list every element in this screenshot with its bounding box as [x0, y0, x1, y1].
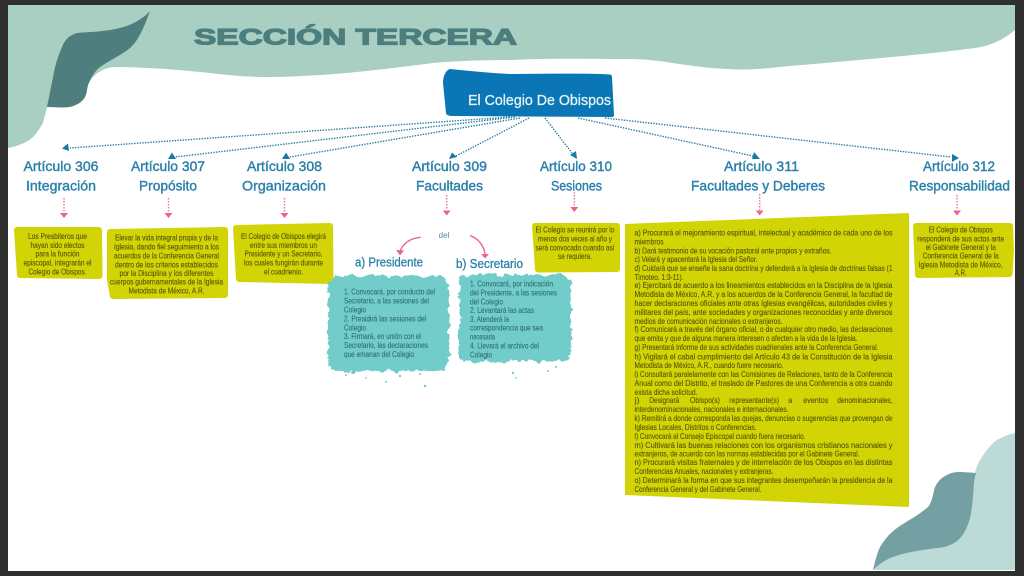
- article 311 column: Obispo(s): [690, 396, 720, 405]
- article 311 column: interdenominacionales, nacionales e internacionales.: [634, 405, 788, 414]
- article 312 column: Artículo 312: [923, 158, 995, 174]
- article 311 column: b) Dará testimonio de su vocación pastoral ante propios y extraños.: [634, 246, 832, 255]
- panel: presidente duties: 2. Presidirá las sesiones del: [344, 314, 426, 323]
- article 308 column: [236, 158, 330, 281]
- panel: secretario duties: necesaria: [470, 333, 495, 342]
- article 311 column: l) Convocará al Consejo Episcopal cuando fuera necesario.: [634, 432, 806, 441]
- article 311 column: medios de comunicación nacionales o extranjeros.: [634, 317, 782, 326]
- article 311 column: Metodista de México, A.R. y a los acuerdos de la Conferencia General, la facultad de: [634, 290, 893, 299]
- article 311 column: Designará: [649, 396, 680, 405]
- panel: secretario duties: Colegio: [470, 350, 492, 359]
- article 311 column: m) Cultivará las buenas relaciones con los organismos cristianos nacionales y: [634, 441, 893, 450]
- article 311 column: f) Comunicará a través del órgano oficial, o de cualquier otro medio, las declaraciones: [634, 325, 892, 334]
- article 311 column: i) Consultará paralelamente con las Comisiones de Relaciones, tanto de la Conferencia: [634, 370, 893, 379]
- article 312 column: El Colegio de Obispos: [929, 225, 993, 234]
- article 311 column: que emita y que de alguna manera interesen o afecten a la vida de la Iglesia.: [634, 334, 858, 343]
- article 308 column: El Colegio de Obispos elegirá: [241, 232, 326, 241]
- article 311 column: representante(s): [729, 396, 779, 405]
- article 307 column: Artículo 307: [131, 158, 205, 174]
- panel: presidente duties: 3. Firmará, en unión con el: [344, 332, 421, 341]
- article 311 column: a) Procurará el mejoramiento espiritual, intelectual y académico de cada uno de los: [634, 229, 892, 238]
- article 311 column: c) Velará y apacentará la Iglesia del Señor.: [634, 255, 758, 264]
- panel: presidente duties: Colegio: [344, 306, 366, 315]
- subheading: a) Presidente: a) Presidente: [355, 254, 423, 270]
- article 307 column: por la Disciplina y los diferentes: [120, 269, 214, 278]
- article 308 column: el cuadrienio.: [264, 268, 303, 277]
- article 311 column: Metodista de México, A.R., cuando fuere necesario.: [634, 361, 784, 370]
- article 311 column: Conferencia General y del Gabinete General.: [634, 485, 762, 494]
- article 306 column: para la función: [36, 250, 80, 259]
- article 311 column: h) Vigilará el cabal cumplimiento del Artículo 43 de la Constitución de la Iglesia: [634, 353, 893, 362]
- article 311 column: Iglesias Locales, Distritos o Conferencias.: [634, 423, 756, 432]
- heading box: El Colegio De Obispos: El Colegio De Obispos: [468, 93, 611, 109]
- article 310 column: se requiera.: [558, 252, 592, 261]
- article 310 column: menos dos veces al año y: [538, 235, 613, 244]
- article 306 column: Integración: [26, 178, 96, 194]
- article 311 column: j): [634, 396, 640, 405]
- article 307 column: Iglesia, dando fiel seguimiento a los: [114, 243, 219, 252]
- article 311 column: denominacionales,: [837, 396, 893, 405]
- article 311 column: eventos: [803, 396, 828, 405]
- panel: secretario duties: 1. Convocará, por indicación: [470, 279, 553, 288]
- panel: secretario duties: 4. Llevará el archivo del: [470, 342, 539, 351]
- article 311 column: d) Cuidará que se enseñe la sana doctrina y defenderá a la Iglesia de doctrinas falsas (1: [634, 264, 893, 273]
- article 308 column: los cuales fungirán durante: [244, 258, 323, 267]
- article 307 column: Propósito: [139, 178, 197, 194]
- article 311 column: Facultades y Deberes: [691, 178, 825, 194]
- article 311 column: Anual como del Distrito, el traslado de Pastores de una Conferencia a otra cuando: [634, 379, 893, 388]
- article 306 column: hayan sido electos: [30, 241, 84, 250]
- article 311 column: militares del país, ante sociedades y organizaciones reconocidas y ante diversos: [634, 308, 892, 317]
- article 311 column: hacer declaraciones oficiales ante otras Iglesias evangélicas, autoridades civiles y: [634, 299, 893, 308]
- article 311 column: [625, 158, 909, 507]
- article 310 column: El Colegio se reunirá por lo: [536, 225, 615, 234]
- panel: presidente duties: 1. Convocará, por conducto del: [344, 288, 435, 297]
- article 311 column: a: [788, 396, 793, 405]
- article 311 column: k) Remitirá a donde corresponda las quejas, denuncias o sugerencias que provengan de: [634, 414, 893, 423]
- article 312 column: el Gabinete General y la: [926, 243, 996, 252]
- article 310 column: [535, 158, 617, 270]
- decorative shapes bottom right: [873, 433, 1015, 570]
- article 308 column: Artículo 308: [247, 158, 322, 174]
- article 310 column: Sesiones: [551, 178, 602, 194]
- article 307 column: [110, 158, 225, 296]
- article 306 column: [17, 158, 100, 277]
- article 306 column: Artículo 306: [24, 158, 99, 174]
- article 311 column: g) Presentará informe de sus actividades cuadrienales ante la Conferencia General.: [634, 343, 878, 352]
- article 307 column: dentro de los criterios establecidos: [115, 260, 218, 269]
- panel: presidente duties: Secretario, a las sesiones del: [344, 297, 429, 306]
- article 311 column: o) Determinará la forma en que sus integrantes desempeñarán la presidencia de la: [634, 476, 893, 485]
- panel: secretario duties: del Colegio: [470, 297, 503, 306]
- article 312 column: A.R.: [955, 268, 967, 277]
- article 309 column: Artículo 309: [412, 158, 487, 174]
- header band: [8, 5, 1015, 148]
- subheading: b) Secretario: b) Secretario: [456, 256, 523, 271]
- article 312 column: Conferencia General de la: [923, 251, 999, 260]
- article 311 column: miembros: [634, 238, 664, 246]
- article 311 column: Conferencias Anuales, nacionales y extranjeras.: [634, 467, 774, 476]
- article 311 column: n) Procurará visitas fraternales y de interrelación de los Obispos en las distintas: [634, 458, 892, 467]
- article 311 column: extranjeros, de acuerdo con las normas establecidas por el Gabinete General.: [634, 450, 860, 458]
- article 312 column: responderá de sus actos ante: [917, 235, 1005, 244]
- heading box: El Colegio De Obispos: [443, 69, 614, 117]
- panel: secretario duties: 2. Levantará las actas: [470, 306, 534, 315]
- article 310 column: será convocado cuando así: [536, 243, 615, 252]
- article 311 column: exista dicha solicitud.: [634, 388, 698, 397]
- article 306 column: Los Presbiteros que: [28, 232, 87, 241]
- article 306 column: Colegio de Obispos.: [28, 268, 86, 277]
- panel: secretario duties: 3. Atenderá la: [470, 315, 509, 324]
- article 310 column: Artículo 310: [540, 158, 612, 174]
- article 311 column: Artículo 311: [724, 158, 799, 174]
- icon: dark leaf top left: [47, 11, 150, 107]
- article 311 column: e) Ejercitará de acuerdo a los lineamientos establecidos en la Disciplina de la Iglesia: [634, 281, 893, 290]
- article 311 column: Timoteo. 1:3-11).: [634, 273, 684, 282]
- article 308 column: entre sus miembros un: [250, 241, 317, 250]
- article 307 column: Metodista de México, A.R.: [128, 287, 204, 296]
- article 309 column: [355, 158, 489, 270]
- dotted connector arrows: [62, 117, 959, 162]
- panel: secretario duties: [459, 275, 571, 379]
- article 309 column: del: [439, 231, 450, 240]
- panel: secretario duties: del Presidente, a las sesiones: [470, 288, 557, 297]
- article 307 column: cuerpos gubernamentales de la Iglesia: [110, 278, 223, 287]
- article 307 column: Elevar la vida integral propia y de la: [115, 234, 218, 243]
- panel: secretario duties: correspondencia que sea: [470, 324, 543, 333]
- title: SECCIÓN TERCERA: [194, 24, 517, 50]
- article 312 column: Iglesia Metodista de México,: [919, 260, 1003, 269]
- panel: presidente duties: Secretario, las declaraciones: [344, 341, 428, 350]
- article 307 column: acuerdos de la Conferencia General: [114, 251, 219, 260]
- panel: presidente duties: Colegio: [344, 323, 366, 332]
- article 312 column: Responsabilidad: [909, 178, 1010, 194]
- article 308 column: Presidente y un Secretario,: [244, 250, 322, 259]
- panel: presidente duties: que emanan del Colegio: [344, 350, 414, 359]
- panel: presidente duties: [328, 276, 449, 387]
- article 309 column: Facultades: [416, 178, 483, 194]
- article 308 column: Organización: [242, 178, 326, 194]
- article 312 column: [909, 158, 1011, 277]
- article 306 column: episcopal, integrarán el: [24, 259, 92, 268]
